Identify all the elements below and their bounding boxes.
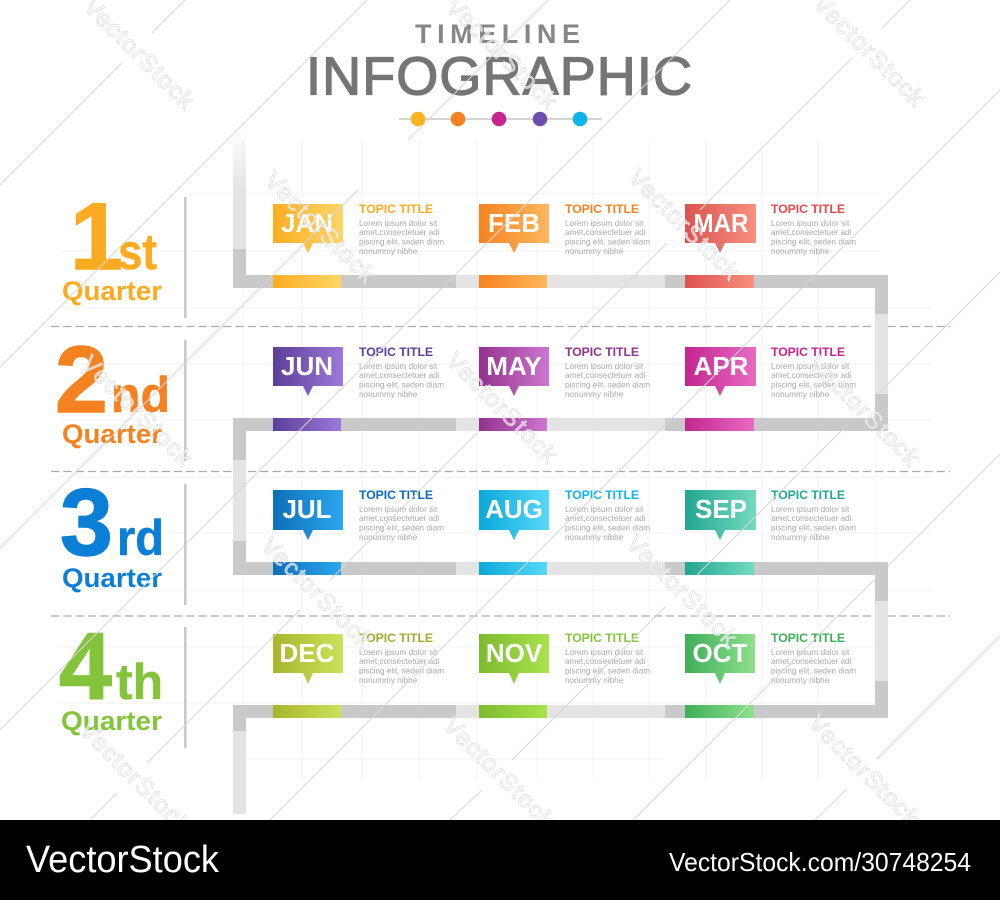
month: DEC: amet,consectetuer adi (359, 657, 440, 666)
month: JUL: amet,consectetuer adi (359, 514, 440, 523)
month: JUL: TOPIC TITLE (359, 488, 433, 502)
month: JAN (273, 202, 444, 288)
month: MAR: amet,consectetuer adi (771, 228, 852, 237)
month: DEC: TOPIC TITLE (359, 631, 433, 645)
quarter label: 4th: th (116, 654, 163, 710)
month: JAN: TOPIC TITLE (359, 202, 433, 216)
month: JAN: piscing elit, seden diam (359, 238, 444, 246)
dashed quarter dividers (51, 326, 950, 616)
month: AUG: piscing elit, seden diam (565, 524, 650, 532)
watermark: VectorStock (74, 717, 196, 839)
month: NOV: TOPIC TITLE (565, 631, 639, 645)
month: NOV: amet,consectetuer adi (565, 657, 646, 666)
month: AUG: nonummy nibhe (565, 533, 624, 542)
month: MAY (479, 345, 650, 431)
month: OCT: Lorem ipsum dolor sit (771, 648, 850, 657)
month: JUN: TOPIC TITLE (359, 345, 433, 359)
month: NOV: piscing elit, seden diam (565, 666, 650, 676)
month: OCT: amet,consectetuer adi (771, 657, 852, 666)
month: AUG: amet,consectetuer adi (565, 514, 646, 523)
month: FEB: amet,consectetuer adi (565, 228, 646, 237)
month: MAR: TOPIC TITLE (771, 202, 845, 216)
month: OCT (685, 631, 856, 718)
month: APR (685, 345, 856, 431)
quarter label: 2nd (55, 327, 170, 449)
month: FEB: TOPIC TITLE (565, 202, 639, 216)
timeline track (233, 130, 888, 814)
month: AUG: Lorem ipsum dolor sit (565, 505, 644, 514)
watermark: VectorStock (621, 530, 743, 652)
quarter label: 4th: 4 (59, 614, 112, 720)
month: SEP: amet,consectetuer adi (771, 514, 852, 523)
month: DEC: piscing elit, seden diam (359, 666, 444, 676)
month: FEB: nonummy nibhe (565, 247, 624, 256)
month: NOV: Lorem ipsum dolor sit (565, 648, 644, 657)
quarter label: 3rd: rd (117, 510, 164, 566)
month: JUL: piscing elit, seden diam (359, 524, 444, 532)
month: JAN: Lorem ipsum dolor sit (359, 219, 438, 228)
month: MAR: nonummy nibhe (771, 247, 830, 256)
watermark: VectorStock (441, 347, 563, 469)
watermark: VectorStock (623, 164, 745, 286)
watermark: VectorStock (438, 712, 560, 834)
month: AUG: TOPIC TITLE (565, 488, 639, 502)
title (306, 19, 692, 106)
title: timeline: TIMELINE (415, 19, 580, 49)
quarter label: 4th: Quarter (61, 706, 162, 736)
month: APR: nonummy nibhe (771, 390, 830, 399)
month: NOV (479, 631, 650, 718)
month: APR: piscing elit, seden diam (771, 380, 856, 390)
month: MAR: Lorem ipsum dolor sit (771, 219, 850, 228)
footer image id: VectorStock.com/30748254 (669, 847, 971, 877)
month: SEP: Lorem ipsum dolor sit (771, 505, 850, 514)
watermark: VectorStock (256, 532, 378, 654)
quarter label: 3rd: Quarter (62, 563, 162, 593)
month: MAY: MAY (486, 351, 542, 381)
month: JAN: JAN (281, 208, 333, 238)
month: MAR: MAR (694, 208, 749, 238)
month: JAN: amet,consectetuer adi (359, 228, 440, 237)
month: DEC: Lorem ipsum dolor sit (359, 648, 438, 657)
decorative dot row (399, 112, 602, 126)
month: JAN: nonummy nibhe (359, 247, 418, 256)
month: JUN: amet,consectetuer adi (359, 371, 440, 380)
footer brand: VectorStock (26, 839, 220, 881)
month: OCT: piscing elit, seden diam (771, 666, 856, 676)
month: MAY: piscing elit, seden diam (565, 380, 650, 390)
month: MAY: TOPIC TITLE (565, 345, 639, 359)
month: AUG (479, 488, 650, 575)
quarter label: 1st: 1 (70, 184, 123, 290)
quarter label: 2nd: Quarter (62, 419, 162, 449)
watermark: VectorStock (803, 710, 925, 832)
month: FEB: FEB (488, 208, 540, 238)
month: JUN: JUN (281, 351, 333, 381)
month: APR: Lorem ipsum dolor sit (771, 362, 850, 371)
month: APR: APR (694, 351, 749, 381)
month: JUL: JUL (282, 494, 332, 524)
month: FEB: Lorem ipsum dolor sit (565, 219, 644, 228)
month: OCT: TOPIC TITLE (771, 631, 845, 645)
month: JUN: nonummy nibhe (359, 390, 418, 399)
month: MAR: piscing elit, seden diam (771, 238, 856, 246)
month: JUL (273, 488, 444, 575)
watermark: VectorStock (259, 167, 381, 289)
watermark: VectorStock (803, 350, 925, 472)
month: MAR (685, 202, 856, 288)
month: NOV: nonummy nibhe (565, 676, 624, 685)
month: SEP: piscing elit, seden diam (771, 524, 856, 532)
month: APR: amet,consectetuer adi (771, 371, 852, 380)
quarter label: 1st (62, 184, 162, 306)
month: JUL: nonummy nibhe (359, 533, 418, 542)
quarter separators (184, 197, 187, 748)
month: MAY: nonummy nibhe (565, 390, 624, 399)
month: AUG: AUG (485, 494, 543, 524)
quarter label: 3rd (60, 470, 164, 593)
watermark (74, 0, 930, 839)
month: SEP: SEP (695, 494, 747, 524)
month: NOV: NOV (486, 638, 543, 668)
month: JUN: piscing elit, seden diam (359, 380, 444, 390)
month: OCT: nonummy nibhe (771, 676, 830, 685)
month: SEP: TOPIC TITLE (771, 488, 845, 502)
month: SEP (685, 488, 856, 575)
month: DEC: DEC (280, 638, 335, 668)
month: JUN (273, 345, 444, 431)
month: FEB (479, 202, 650, 288)
quarter label: 2nd: nd (111, 367, 170, 423)
month: APR: TOPIC TITLE (771, 345, 845, 359)
month: SEP: nonummy nibhe (771, 533, 830, 542)
month: DEC (273, 631, 444, 718)
month: MAY: amet,consectetuer adi (565, 371, 646, 380)
background grid (60, 140, 930, 780)
quarter label: 1st: Quarter (62, 276, 162, 306)
footer bar (0, 820, 1000, 900)
quarter label: 1st: st (118, 224, 157, 280)
month: FEB: piscing elit, seden diam (565, 238, 650, 246)
month: MAY: Lorem ipsum dolor sit (565, 362, 644, 371)
title: infographic: INFOGRAPHIC (306, 46, 692, 106)
month: OCT: OCT (693, 638, 748, 668)
month: JUL: Lorem ipsum dolor sit (359, 505, 438, 514)
month: JUN: Lorem ipsum dolor sit (359, 362, 438, 371)
watermark: VectorStock (76, 350, 198, 472)
quarter label: 2nd: 2 (55, 327, 108, 433)
quarter label: 4th (59, 614, 163, 736)
month: DEC: nonummy nibhe (359, 676, 418, 685)
quarter label: 3rd: 3 (60, 470, 113, 576)
